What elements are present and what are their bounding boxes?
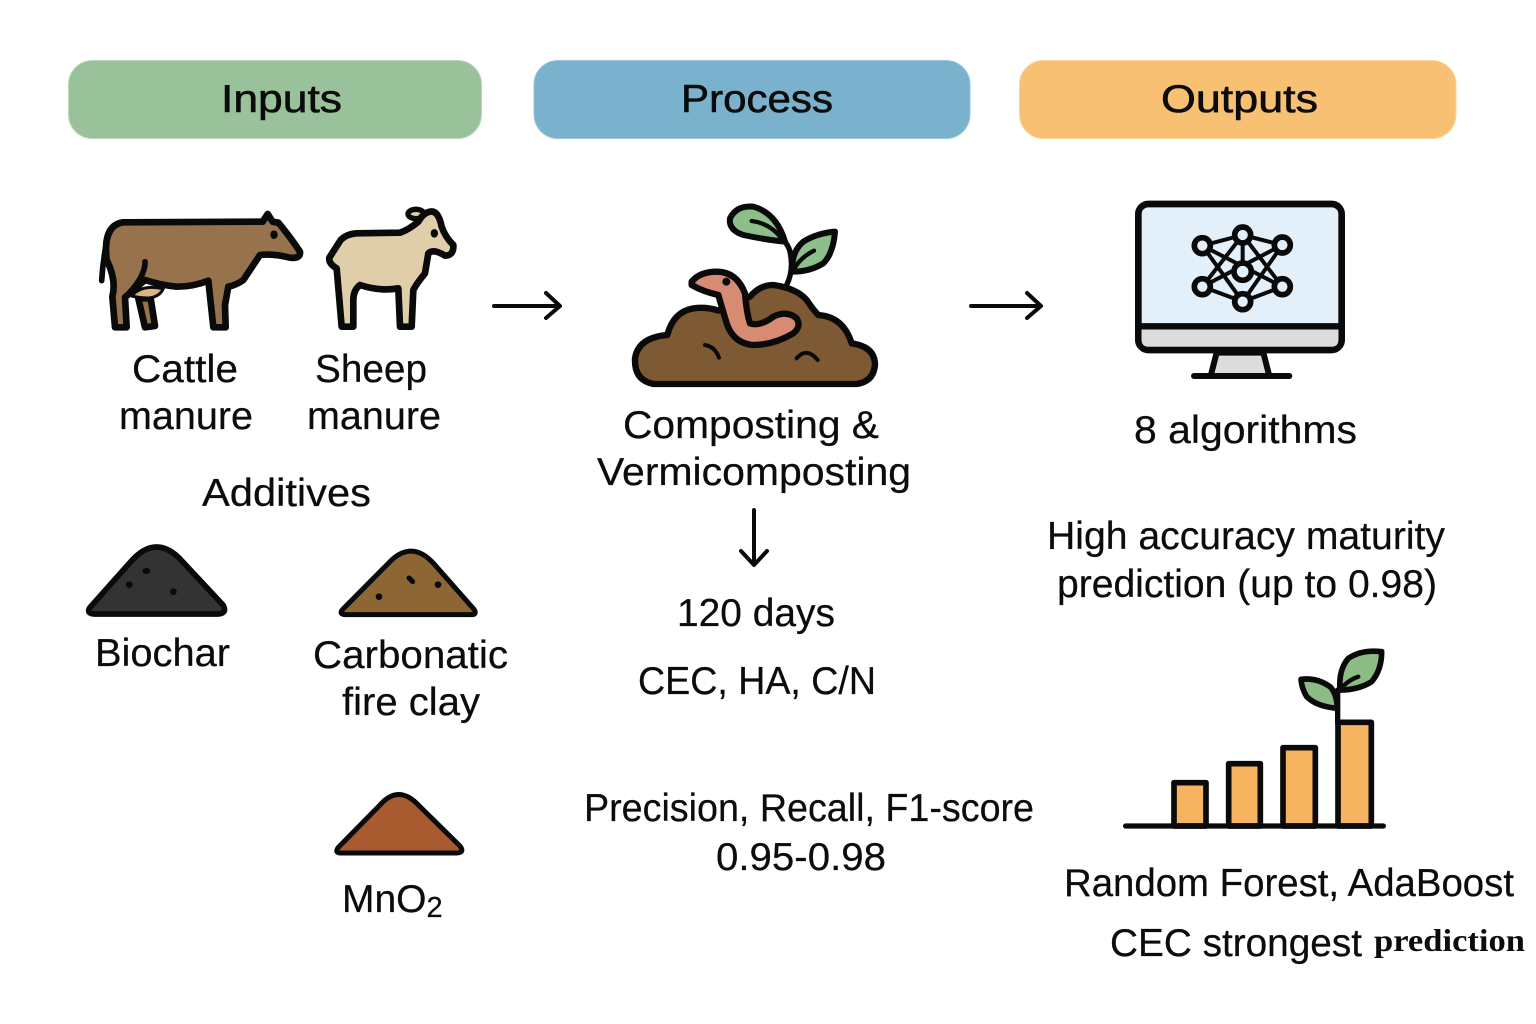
text: CEC strongest prediction: prediction (1374, 922, 1525, 958)
label: cattle manure: Cattle (132, 348, 238, 391)
icon: compost worm and seedling (635, 206, 875, 384)
arrow: process down (741, 510, 767, 565)
header: Outputs (1020, 60, 1456, 138)
header: Inputs: Inputs (221, 78, 342, 121)
label: MnO2: MnO (342, 878, 427, 921)
text: accuracy: prediction (up to 0.98) (1057, 563, 1437, 606)
arrow: inputs to process (494, 293, 560, 318)
text: best models: Random Forest, AdaBoost (1064, 862, 1514, 905)
header: Inputs (68, 60, 482, 138)
label: MnO2: 2 (427, 892, 443, 924)
arrow: process to outputs (971, 293, 1041, 318)
text: accuracy: High accuracy maturity (1047, 515, 1445, 558)
label: composting and vermicomposting (597, 404, 911, 494)
header: Outputs: Outputs (1161, 78, 1318, 121)
label: composting and vermicomposting: Vermicomposting (597, 451, 911, 494)
icon: computer with neural network (1138, 204, 1342, 376)
text: algorithms: 8 algorithms (1134, 409, 1357, 452)
panel: process (584, 206, 1034, 879)
text: metrics: Precision, Recall, F1-score (584, 787, 1034, 830)
icon: biochar pile (89, 547, 225, 614)
label: composting and vermicomposting: Composting & (623, 404, 879, 447)
icon: MnO2 pile (337, 794, 462, 853)
label: carbonatic fire clay (313, 634, 508, 724)
label: cattle manure: manure (119, 395, 253, 438)
text: CEC strongest prediction: CEC strongest (1110, 922, 1362, 965)
icon: sheep (329, 209, 453, 327)
header: Process: Process (681, 78, 833, 121)
text: parameters: CEC, HA, C/N (638, 660, 876, 703)
label: carbonatic fire clay: Carbonatic (313, 634, 508, 677)
panel: outputs (1047, 204, 1525, 965)
label: sheep manure: manure (307, 395, 441, 438)
text: accuracy (1047, 515, 1445, 606)
icon: cattle (102, 214, 300, 327)
label: sheep manure: Sheep (315, 348, 427, 391)
text: duration: 120 days (677, 592, 835, 635)
text: metrics: 0.95-0.98 (716, 836, 886, 879)
label: cattle manure (119, 348, 253, 438)
text: CEC strongest prediction (1110, 922, 1525, 965)
header: Process (534, 60, 970, 138)
label: carbonatic fire clay: fire clay (342, 681, 481, 724)
text: metrics (584, 787, 1034, 879)
icon: bar chart with seedling (1126, 651, 1383, 826)
label: biochar: Biochar (95, 632, 230, 675)
heading: additives: Additives (202, 472, 371, 515)
label: sheep manure (307, 348, 441, 438)
panel: inputs (89, 209, 508, 924)
icon: carbonatic fire clay pile (341, 551, 475, 615)
